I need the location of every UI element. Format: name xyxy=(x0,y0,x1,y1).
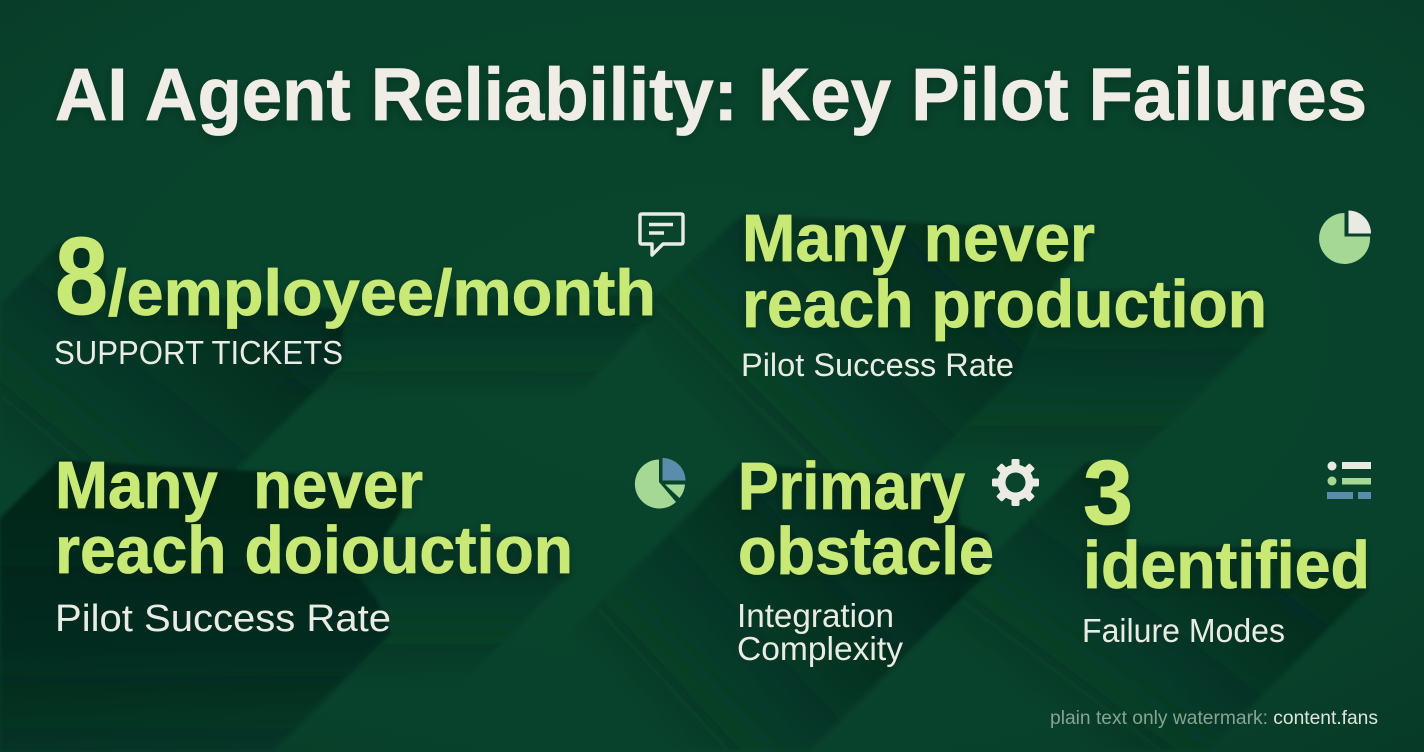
watermark: plain text only watermark: content.fans xyxy=(1050,708,1378,729)
icon: pie chart three segments xyxy=(635,458,686,508)
label: pilot success rate: Pilot Success Rate xyxy=(55,598,391,640)
panel: pilot success rate, bottom xyxy=(55,448,686,640)
panel: failure modes xyxy=(1082,442,1371,649)
label: support tickets: SUPPORT TICKETS xyxy=(54,334,343,371)
stat: 8/employee/month: 8 xyxy=(55,215,108,338)
icon: list xyxy=(1327,462,1371,499)
panel: support tickets xyxy=(54,214,683,371)
stat: many never reach doiouction xyxy=(55,448,573,588)
stat: primary obstacle xyxy=(738,449,994,589)
title: AI Agent Reliability: Key Pilot Failures xyxy=(55,53,1367,136)
label: failure modes: Failure Modes xyxy=(1082,612,1285,649)
label: integration complexity: Integration xyxy=(737,597,894,634)
stat: many never reach production: reach production xyxy=(742,267,1267,342)
stat: many never reach production: Many never xyxy=(742,201,1095,276)
stat: many never reach production xyxy=(742,201,1267,342)
stat: 8/employee/month: /employee/month xyxy=(108,256,656,329)
icon: pie chart quarter xyxy=(1319,210,1371,264)
label: integration complexity: Complexity xyxy=(737,630,904,667)
stat: many never reach doiouction: Many never xyxy=(55,448,423,523)
label: pilot success rate: Pilot Success Rate xyxy=(741,347,1014,383)
panel: pilot success rate, top xyxy=(741,201,1371,383)
stat: primary obstacle: obstacle xyxy=(738,514,994,589)
stat: primary obstacle: Primary xyxy=(738,449,965,524)
panel: primary obstacle xyxy=(737,449,1039,667)
stat: 3 identified xyxy=(1083,442,1370,603)
stat: 8/employee/month xyxy=(55,215,656,338)
stat: 3 identified: identified xyxy=(1083,528,1370,603)
stat: many never reach doiouction: reach doiouction xyxy=(55,513,573,588)
stat: 3 identified: 3 xyxy=(1083,442,1133,544)
icon: speech bubble xyxy=(640,214,683,255)
long diagonal shadows xyxy=(0,215,1367,752)
label: integration complexity xyxy=(737,597,904,667)
icon: gear xyxy=(992,459,1039,506)
